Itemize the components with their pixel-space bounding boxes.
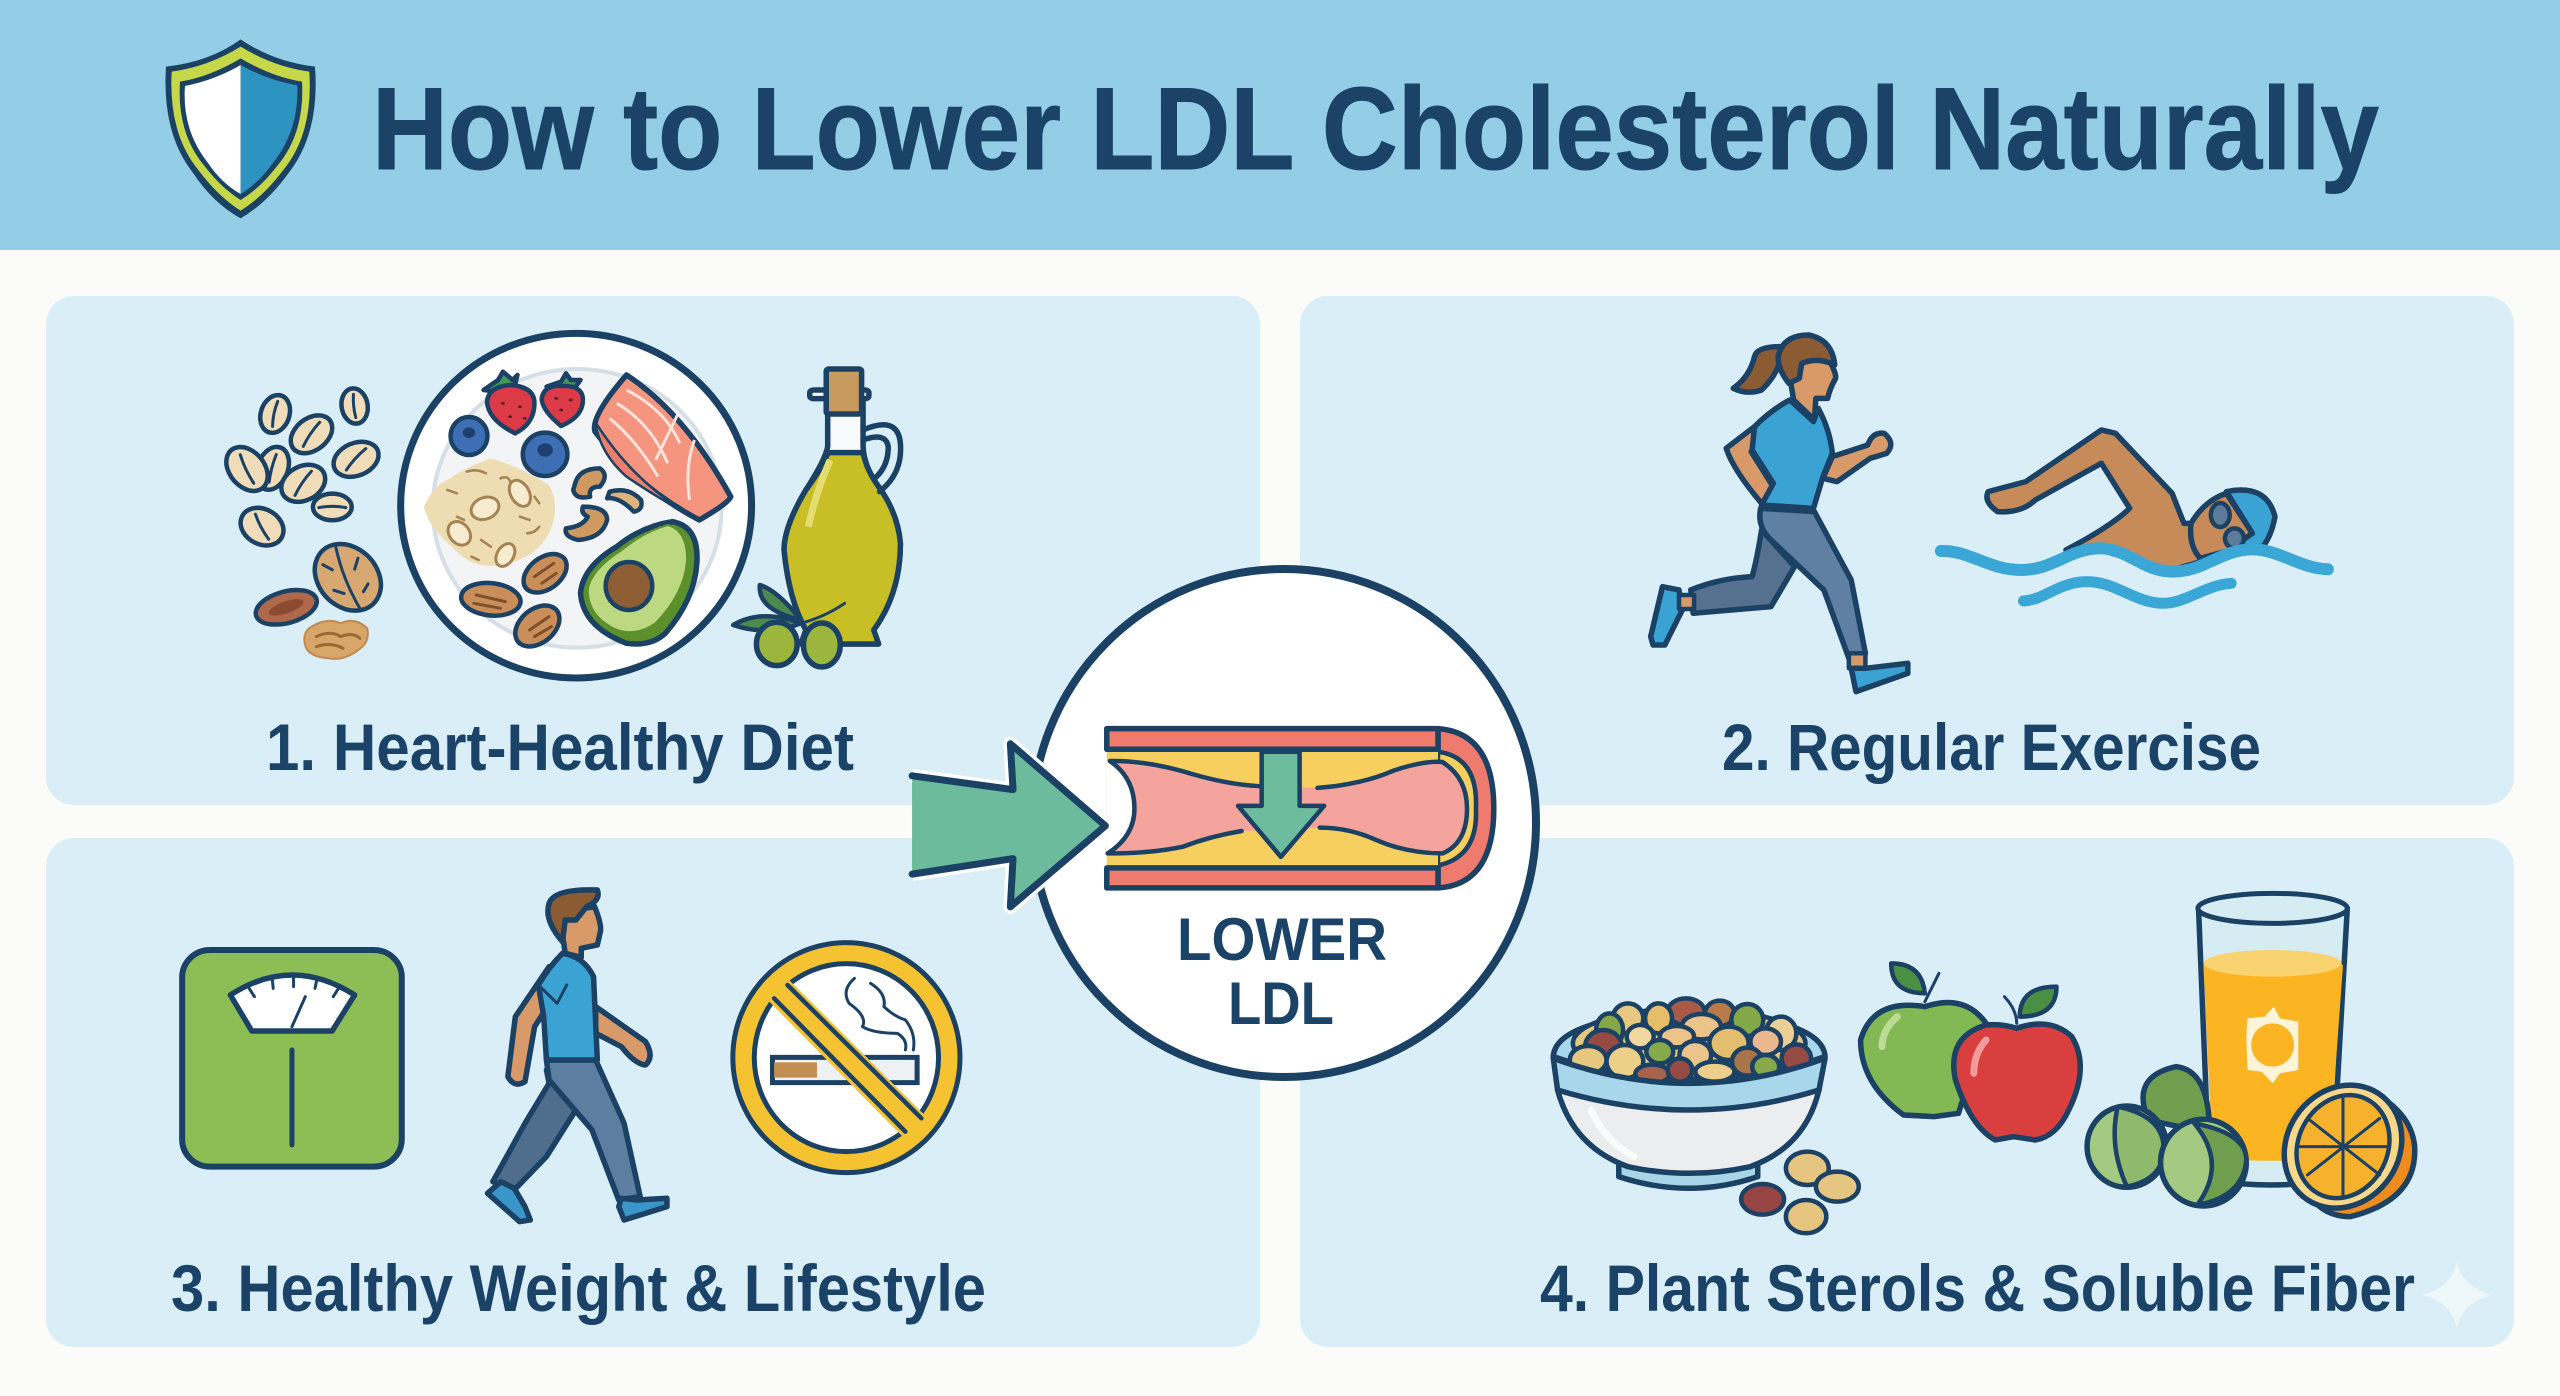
icon: no smoking [733, 943, 960, 1173]
cashews [573, 468, 605, 497]
label: healthy weight and lifestyle: 3. Healthy Weight & Lifestyle [171, 1251, 986, 1325]
arrow: into circle [912, 744, 1105, 907]
plate [401, 333, 752, 678]
panel: plant sterols and soluble fiber [1300, 838, 2514, 1347]
panel: regular exercise [1300, 296, 2514, 805]
icon: juice glass [2198, 893, 2347, 1185]
header band [0, 0, 2560, 250]
avocado [580, 522, 697, 644]
icon: swimmer [1941, 430, 2328, 603]
oats [219, 388, 388, 550]
title: How to Lower LDL Cholesterol Naturally [372, 63, 2379, 194]
text: lower LDL: LDL [1228, 970, 1334, 1037]
label: plant sterols and soluble fiber: 4. Plant Sterols & Soluble Fiber [1540, 1251, 2415, 1325]
panel: heart-healthy diet [46, 296, 1260, 805]
blueberries [451, 417, 487, 455]
center circle: lower LDL [1032, 569, 1536, 1077]
icon: artery [1107, 729, 1494, 888]
olives [760, 585, 801, 620]
label: heart-healthy diet: 1. Heart-Healthy Diet [266, 710, 854, 784]
icon: scale [182, 950, 402, 1167]
icon: down arrow [1238, 752, 1324, 857]
icon: runner [1651, 335, 1908, 692]
icon: shield [165, 39, 316, 218]
salmon [594, 375, 731, 520]
olive oil bottle [784, 400, 900, 644]
panel: healthy weight and lifestyle [46, 838, 1260, 1347]
icon: walking man [487, 890, 667, 1222]
text: lower LDL [1177, 906, 1387, 1037]
label: regular exercise: 2. Regular Exercise [1722, 710, 2261, 784]
icon: sparkle [2422, 1262, 2492, 1328]
oatmeal [424, 458, 555, 566]
text: lower LDL: LOWER [1177, 906, 1387, 973]
walnut and nuts [247, 539, 391, 659]
icon: bowl of beans [1553, 998, 1859, 1233]
icon: diet foods [219, 333, 901, 678]
strawberries [484, 372, 517, 393]
almonds [456, 549, 575, 651]
icon: brussels sprouts [2087, 1067, 2246, 1206]
icon: apples [1861, 963, 2080, 1140]
icon: orange half [2275, 1082, 2415, 1217]
